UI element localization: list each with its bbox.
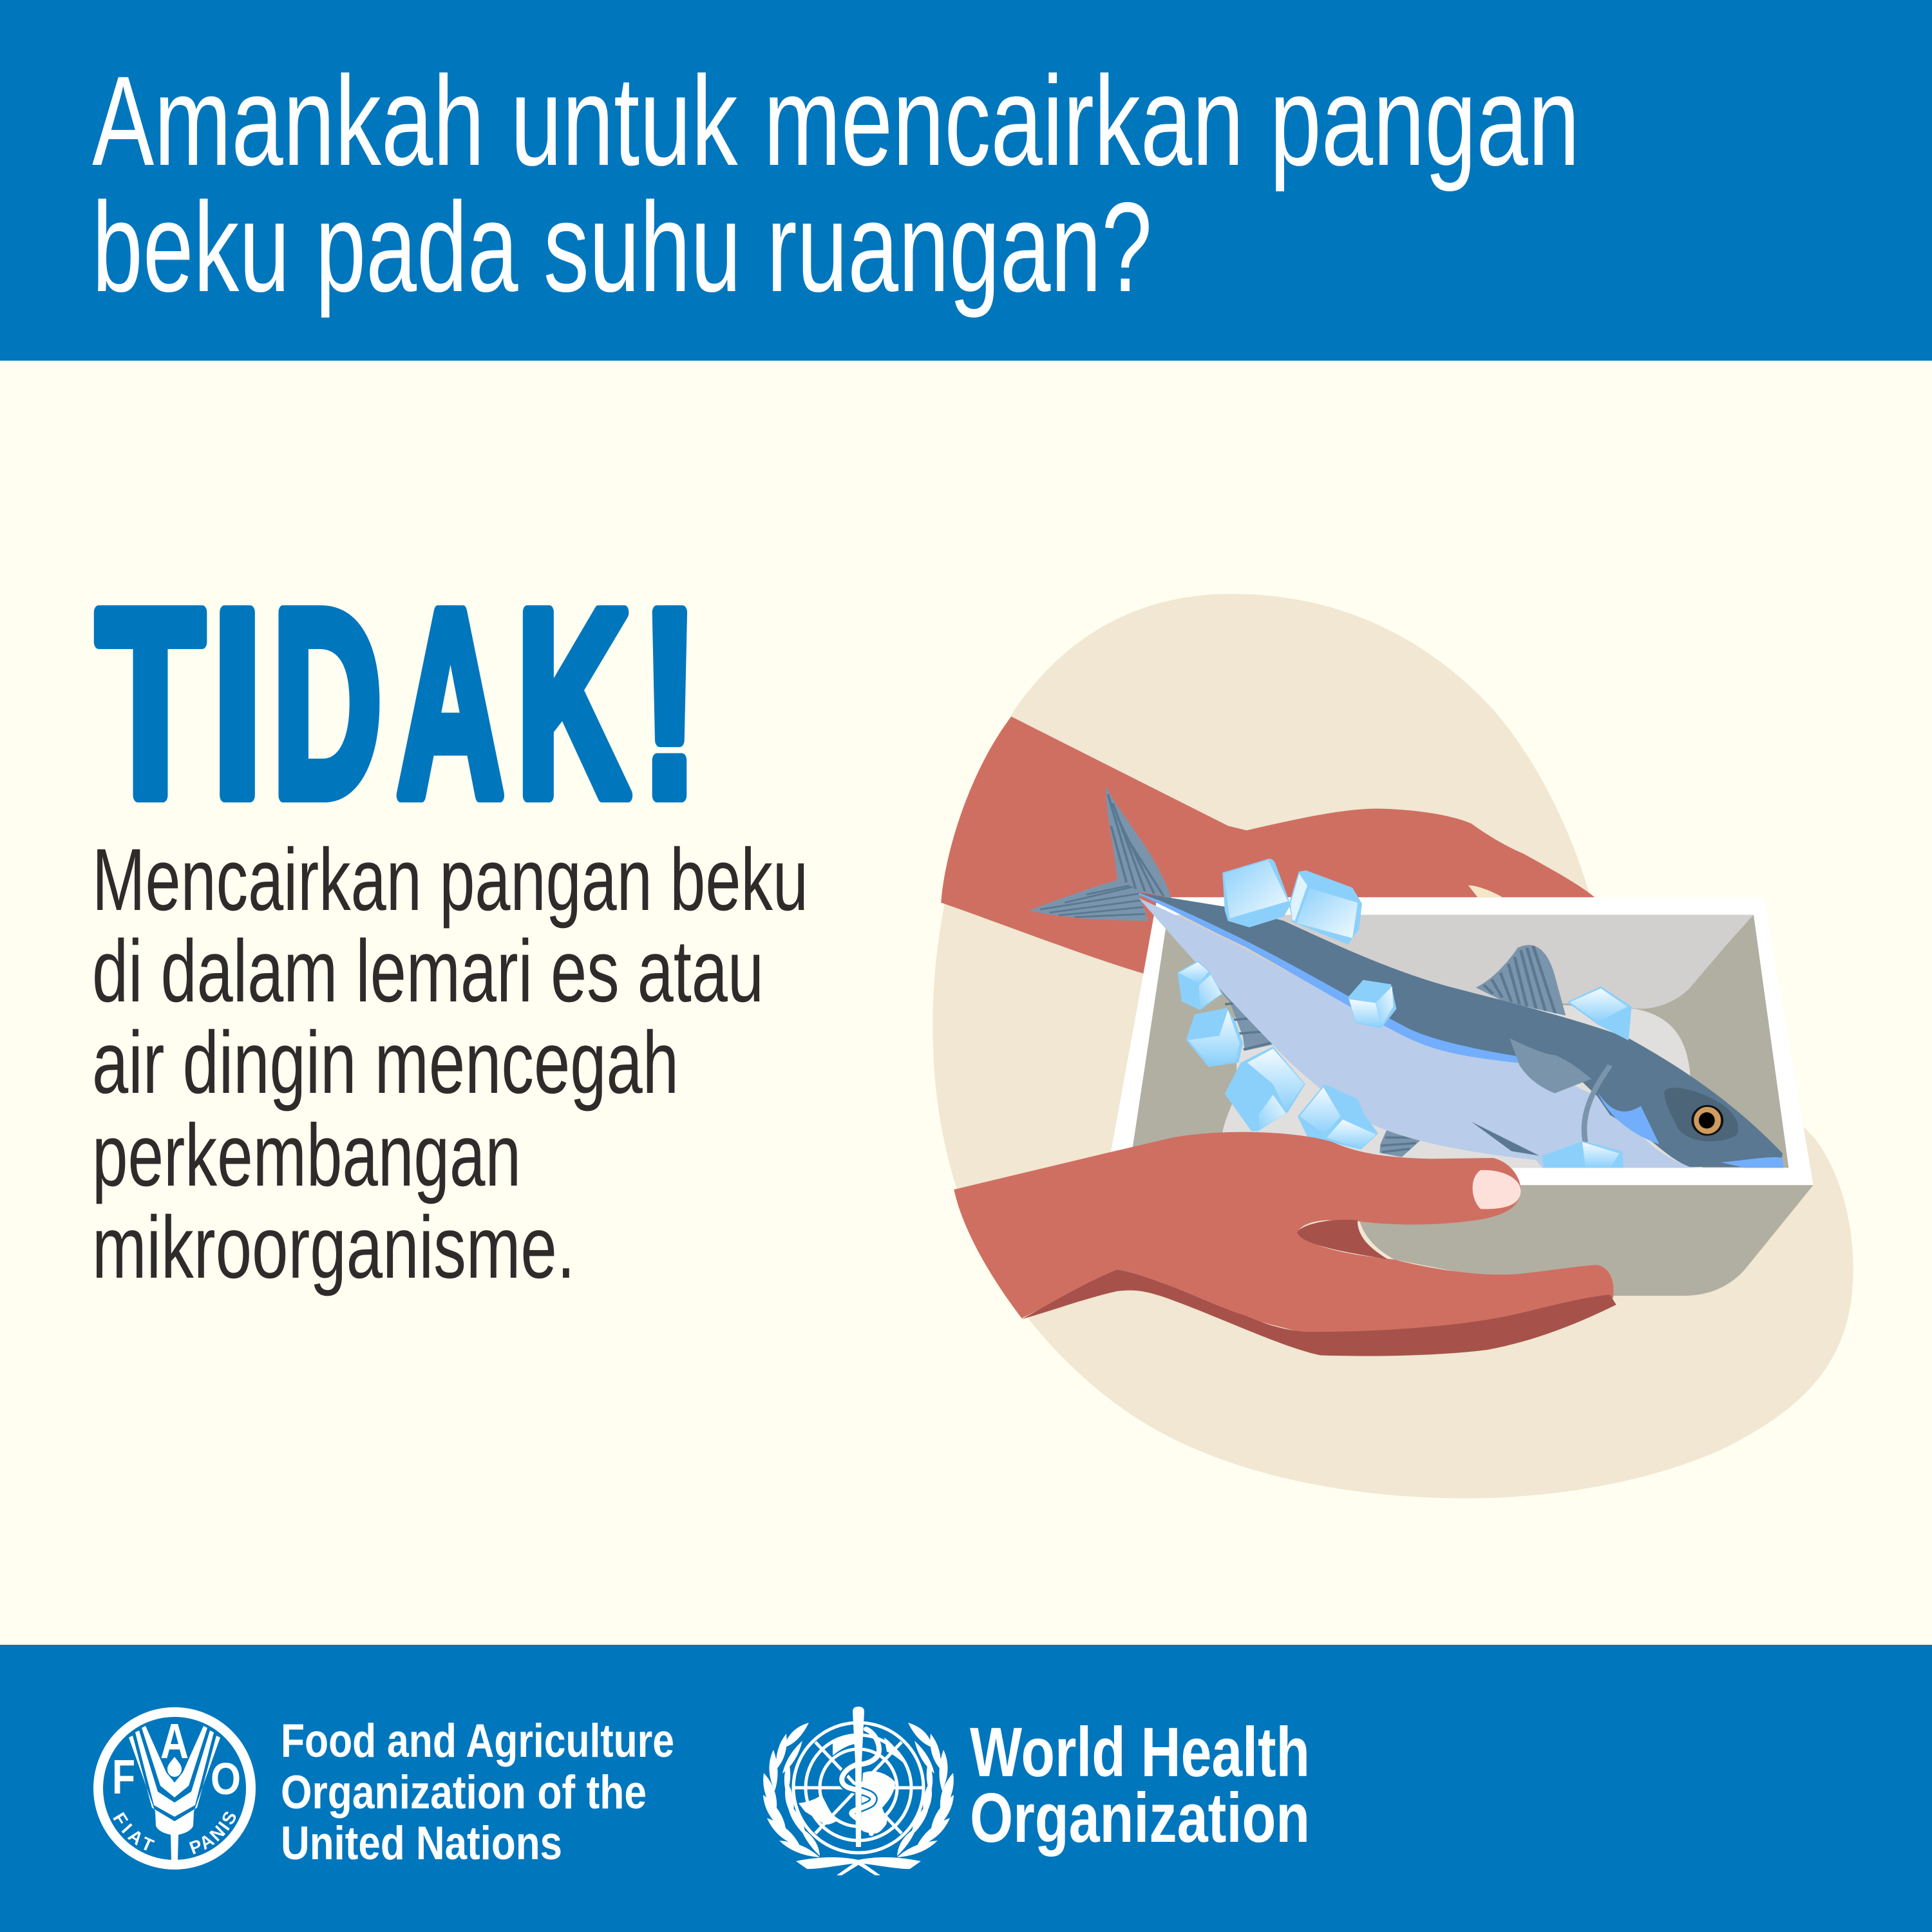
body text: Mencairkan pangan beku	[92, 831, 808, 929]
FAO logo: F	[112, 1750, 135, 1804]
title: beku pada suhu ruangan?	[92, 176, 1152, 318]
box body	[1358, 1185, 1814, 1296]
body text: di dalam lemari es atau	[92, 922, 764, 1021]
belly	[1139, 898, 1703, 1168]
body text: mikroorganisme.	[92, 1198, 575, 1297]
tail fin	[1029, 786, 1171, 921]
ice cube F	[1298, 1084, 1378, 1150]
FAO logo: FIAT	[113, 1812, 155, 1851]
side stripe	[1139, 893, 1519, 1063]
title	[92, 50, 1580, 318]
fish	[1029, 786, 1784, 1168]
heading: TIDAK!: K	[516, 554, 630, 852]
FAO logo: O	[211, 1754, 241, 1804]
FAO logo	[93, 1707, 256, 1870]
ice cube G	[1348, 980, 1396, 1028]
heading: TIDAK!: !	[640, 554, 699, 852]
heading: TIDAK!: A	[397, 554, 504, 852]
eye	[1692, 1106, 1722, 1135]
box floor	[1222, 989, 1703, 1168]
FAO name: Organization of the	[281, 1766, 647, 1819]
finger tip	[1468, 886, 1502, 897]
palm crease	[1297, 1220, 1388, 1260]
heading: TIDAK!: T	[97, 554, 204, 852]
footer band	[0, 1645, 1932, 1932]
ice cube B	[1289, 871, 1362, 945]
upper arm and hand	[941, 717, 1595, 980]
ice cube D	[1186, 1008, 1243, 1067]
header band	[0, 0, 1932, 361]
ice cube bottom	[1542, 1141, 1624, 1168]
heading: TIDAK!: I	[213, 554, 262, 852]
dorsal fin	[1476, 945, 1566, 1016]
lower fin	[1472, 1122, 1539, 1155]
ice cube A	[1222, 858, 1290, 927]
box interior	[1130, 915, 1789, 1168]
FAO name: Food and Agriculture	[281, 1715, 674, 1767]
head mark	[1664, 1088, 1738, 1141]
WHO logo	[763, 1707, 954, 1875]
FAO name	[281, 1715, 674, 1870]
ice cube right	[1567, 986, 1632, 1041]
WHO name: Organization	[970, 1779, 1310, 1857]
body text	[92, 831, 808, 1297]
ice cubes	[1177, 858, 1396, 1150]
WHO name: World Health	[970, 1713, 1310, 1792]
WHO name	[970, 1713, 1310, 1857]
hand shadow	[1022, 1269, 1616, 1356]
back	[1139, 893, 1783, 1167]
lower hand	[954, 1132, 1613, 1334]
pectoral fin	[1510, 1038, 1591, 1094]
body text: perkembangan	[92, 1106, 521, 1205]
thumb nail	[1473, 1170, 1520, 1209]
FAO logo: PANIS	[189, 1812, 236, 1855]
ice cube C	[1177, 961, 1222, 1010]
FAO logo: A	[160, 1714, 189, 1769]
mouth	[1721, 1157, 1784, 1168]
belly fin	[1379, 1130, 1421, 1157]
ice cube E	[1225, 1046, 1305, 1132]
box rim	[1105, 897, 1814, 1185]
FAO name: United Nations	[281, 1817, 562, 1870]
gill	[1598, 1092, 1660, 1144]
gill line	[1584, 1065, 1610, 1142]
box back wall	[1168, 915, 1754, 1009]
body text: air dingin mencegah	[92, 1014, 679, 1112]
heading: TIDAK!: D	[272, 554, 382, 852]
rear fin	[1204, 972, 1273, 1051]
background blob	[933, 594, 1853, 1499]
illustration: hands holding box of fish on ice	[941, 717, 1814, 1356]
